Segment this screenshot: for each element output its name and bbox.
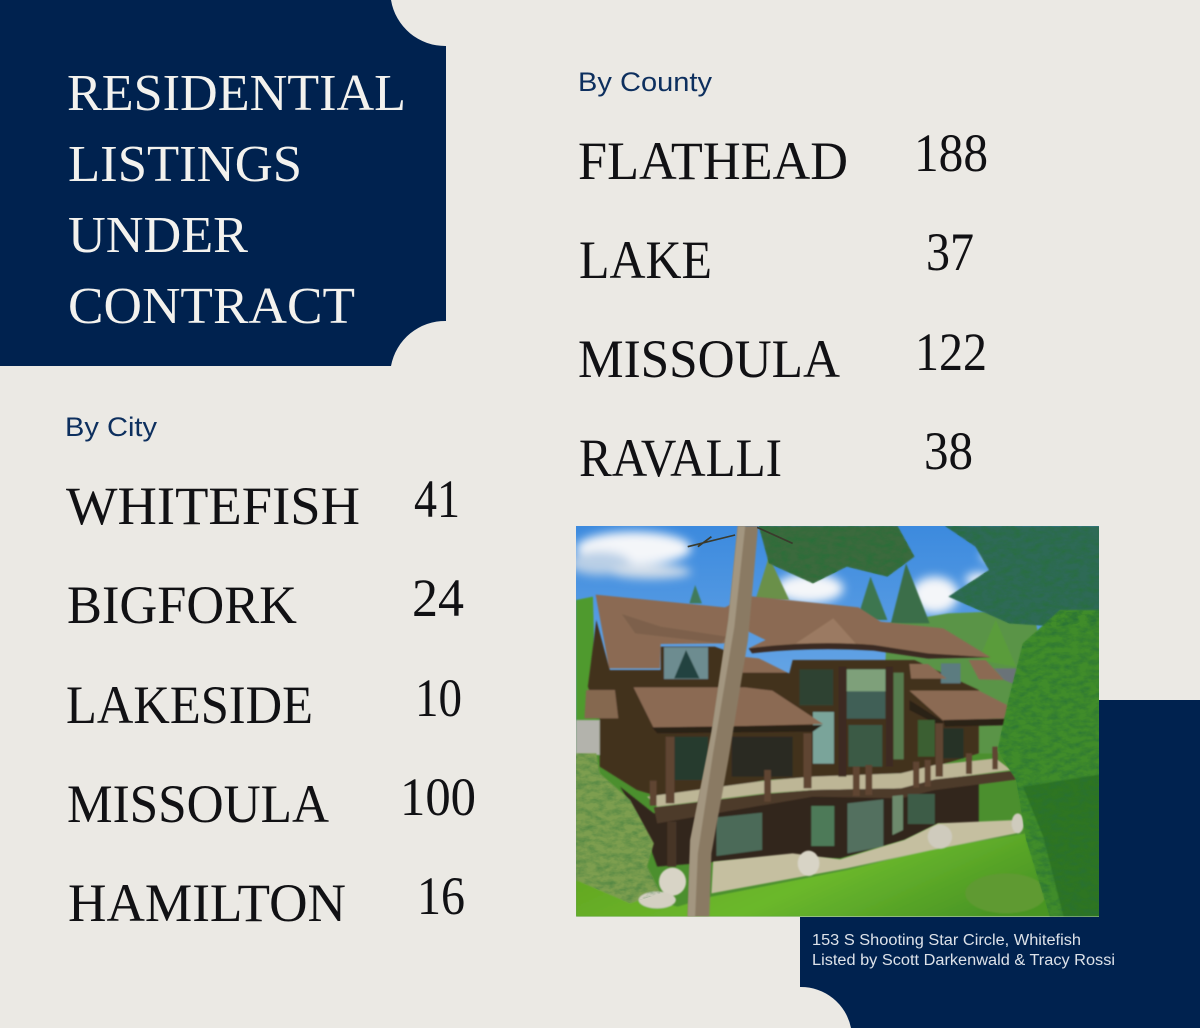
lower glass xyxy=(716,813,762,856)
title panel shape with notched corners xyxy=(0,0,446,366)
row: Hamilton xyxy=(68,866,465,933)
row: Missoula: 100 xyxy=(400,767,476,827)
row: Lakeside xyxy=(66,668,462,735)
driveway xyxy=(576,720,600,755)
heading: UNDER xyxy=(68,207,248,264)
row: Ravalli xyxy=(579,421,973,488)
foliage texture xyxy=(998,622,1099,916)
pine trunk xyxy=(688,526,758,917)
row: Flathead: 188 xyxy=(914,123,988,183)
bush texture xyxy=(576,753,661,903)
row: Missoula county xyxy=(578,322,987,389)
lawn and patio xyxy=(576,753,1107,917)
porch roofs xyxy=(634,687,823,728)
main roof and house xyxy=(576,595,1031,867)
row: Bigfork: BIGFORK xyxy=(67,575,297,635)
row: Whitefish: 41 xyxy=(414,469,460,529)
row: Lake: LAKE xyxy=(579,230,712,290)
row: Missoula county: MISSOULA xyxy=(578,329,840,389)
row: Missoula county: 122 xyxy=(915,322,987,382)
by city heading: By City xyxy=(65,412,158,442)
caption xyxy=(812,932,1115,969)
row: Whitefish xyxy=(66,469,460,536)
row: Flathead xyxy=(578,123,988,191)
panel: title xyxy=(0,0,446,366)
overhead branches xyxy=(759,526,1107,627)
panel: by county xyxy=(578,67,988,488)
row: Whitefish: WHITEFISH xyxy=(66,476,360,536)
row: Lake xyxy=(579,222,974,290)
dormer roofs xyxy=(742,657,788,673)
heading xyxy=(67,65,406,335)
row: Bigfork xyxy=(67,568,464,635)
row: Lakeside: 10 xyxy=(415,668,462,728)
row: Lake: 37 xyxy=(926,222,974,282)
deck xyxy=(647,758,1011,807)
crown texture xyxy=(759,526,918,586)
photo: log house among trees xyxy=(569,526,1107,917)
heading: CONTRACT xyxy=(68,278,355,335)
background forest xyxy=(576,557,1107,917)
row: Flathead: FLATHEAD xyxy=(578,131,848,191)
heading: LISTINGS xyxy=(68,136,302,193)
row: Hamilton: HAMILTON xyxy=(68,873,346,933)
row: Missoula xyxy=(67,767,476,834)
row: Ravalli: RAVALLI xyxy=(579,428,782,488)
tall glass xyxy=(799,669,833,705)
heading: RESIDENTIAL xyxy=(67,65,406,122)
row: Hamilton: 16 xyxy=(417,866,465,926)
upper window xyxy=(664,647,708,679)
panel: by city xyxy=(65,412,476,933)
bough texture xyxy=(945,526,1107,629)
porch glass xyxy=(674,737,708,780)
caption line: listing agents: Listed by Scott Darkenwald & Tracy Rossi xyxy=(812,952,1115,969)
row: Missoula: MISSOULA xyxy=(67,774,329,834)
foreground fir xyxy=(997,610,1107,917)
by county heading: By County xyxy=(578,67,713,97)
row: Lakeside: LAKESIDE xyxy=(66,675,313,735)
row: Ravalli: 38 xyxy=(924,421,973,481)
deck posts xyxy=(649,722,999,868)
panel: navy caption block xyxy=(800,700,1200,1028)
caption line: address: 153 S Shooting Star Circle, Whitefish xyxy=(812,932,1081,949)
house walls xyxy=(588,620,979,800)
row: Bigfork: 24 xyxy=(412,568,464,628)
